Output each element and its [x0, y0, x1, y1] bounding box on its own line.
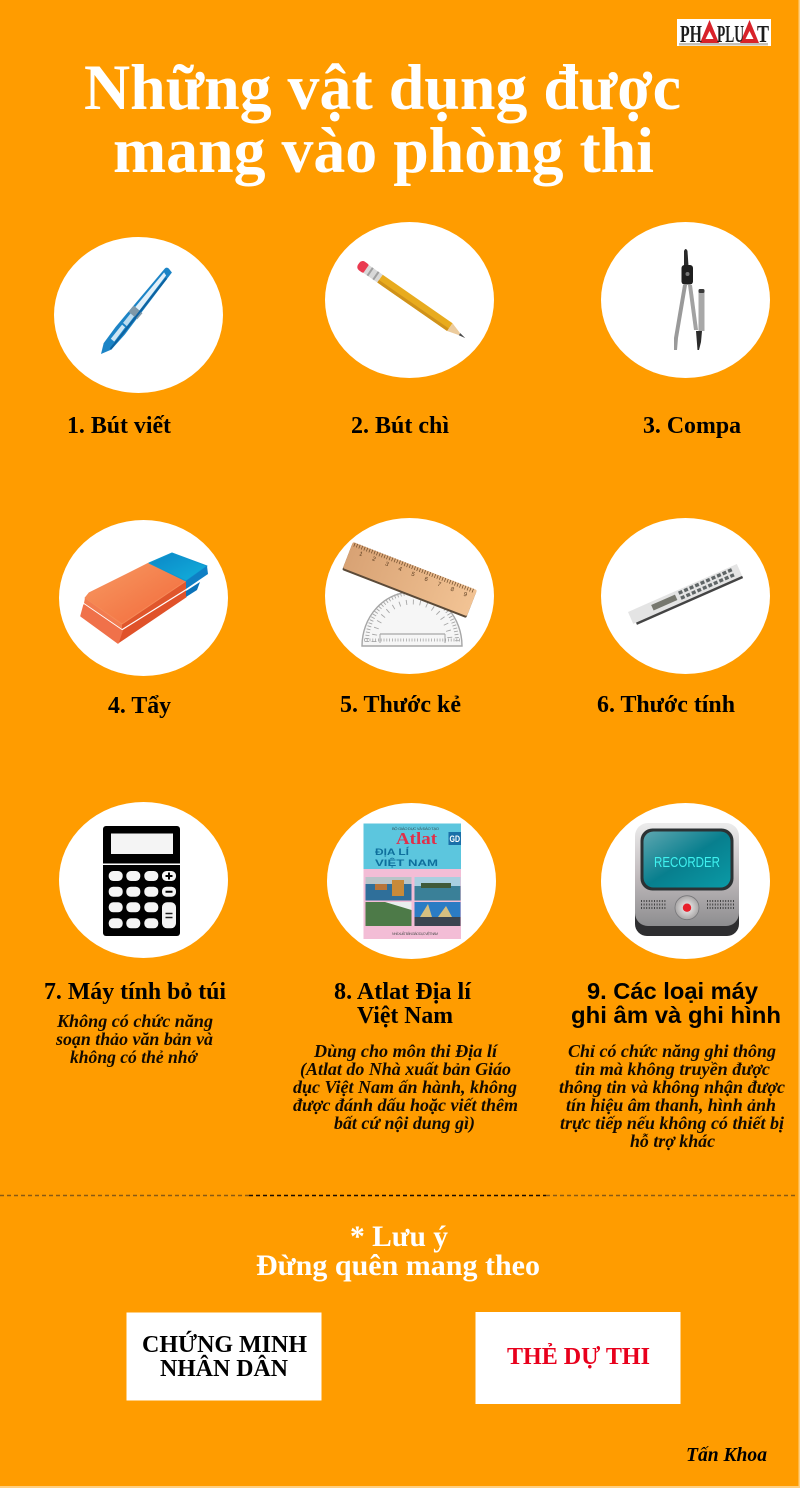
icon: ruler: 2	[371, 556, 377, 563]
description 8: Dùng cho môn thi Địa lí	[313, 1041, 499, 1061]
icon: ruler: 8	[449, 587, 455, 594]
description 8: được đánh dấu hoặc viết thêm	[293, 1095, 518, 1115]
description 7: soạn thảo văn bản và	[55, 1029, 213, 1049]
box: Chứng minh nhân dân: CHỨNG MINH	[142, 1332, 307, 1358]
title	[84, 52, 681, 187]
description 9	[559, 1041, 785, 1151]
description 9: thông tin và không nhận được	[559, 1077, 785, 1097]
description 7: Không có chức năng	[56, 1011, 213, 1031]
icon: ruler: 1	[358, 551, 364, 558]
label 8: 8. Atlat Địa lí	[334, 979, 471, 1005]
icon: atlas book cover: NHÀ XUẤT BẢN GIÁO DỤC VIỆT NAM	[392, 931, 438, 936]
label 7: 7. Máy tính bỏ túi	[44, 979, 226, 1005]
icon: ruler: 3	[384, 561, 390, 568]
note heading	[256, 1220, 540, 1282]
icon: ruler: 7	[436, 582, 442, 589]
icon: ruler: 5	[410, 571, 416, 579]
item 9: recorders	[559, 803, 785, 1151]
label 2: 2. Bút chì	[351, 413, 449, 439]
label 1: 1. Bút viết	[67, 413, 171, 439]
logo: Pháp Luật	[677, 19, 771, 48]
circle 9	[601, 803, 770, 959]
icon: ruler: 6	[423, 577, 429, 584]
item 6: calculator ruler	[597, 518, 770, 718]
icon: compass	[674, 249, 704, 350]
author credit: Tấn Khoa	[686, 1445, 767, 1466]
title: Những vật dụng được	[84, 52, 681, 124]
icon: atlas book cover	[364, 824, 461, 939]
circle 3	[601, 222, 770, 378]
icon: recorder device: RECORDER	[654, 854, 720, 871]
icon: ruler: 9	[462, 592, 468, 599]
note heading: * Lưu ý	[350, 1220, 448, 1253]
icon: calculator ruler	[628, 564, 743, 626]
description 7	[55, 1011, 213, 1067]
icon: atlas book cover: GD	[450, 834, 460, 844]
circle 2	[325, 222, 494, 378]
icon: atlas book cover: ĐỊA LÍ	[375, 847, 410, 857]
box: Thẻ dự thi: THẺ DỰ THI	[507, 1344, 650, 1370]
item 1: pen	[54, 237, 223, 439]
description 9: trực tiếp nếu không có thiết bị	[560, 1113, 784, 1133]
icon: eraser	[81, 553, 208, 643]
description 9: Chỉ có chức năng ghi thông	[568, 1041, 776, 1061]
icon: pen	[96, 267, 176, 358]
logo: Pháp Luật: PLU	[717, 22, 744, 48]
box: Thẻ dự thi	[476, 1312, 680, 1404]
item 5: ruler and protractor	[325, 518, 494, 718]
circle 7	[59, 802, 228, 958]
label 4: 4. Tẩy	[108, 693, 171, 719]
label 8	[334, 979, 471, 1029]
title: mang vào phòng thi	[113, 115, 654, 187]
box: Chứng minh nhân dân: NHÂN DÂN	[160, 1355, 289, 1382]
icon: atlas book cover: VIỆT NAM	[375, 857, 438, 868]
icon: ruler: 4	[397, 566, 403, 573]
logo: Pháp Luật: T	[757, 22, 769, 48]
item 2: pencil	[325, 222, 494, 439]
icon: atlas book cover: Atlat	[396, 829, 437, 848]
description 7: không có thẻ nhớ	[70, 1047, 198, 1067]
item 3: compass	[601, 222, 770, 439]
description 9: tín hiệu âm thanh, hình ảnh	[566, 1095, 776, 1115]
circle 8	[327, 803, 496, 959]
icon: atlas book cover: BỘ GIÁO DỤC VÀ ĐÀO TẠO	[392, 826, 439, 831]
description 8: bất cứ nội dung gì)	[334, 1113, 475, 1134]
item 8: atlas	[293, 803, 518, 1134]
icon: ruler	[342, 542, 477, 618]
item 7: pocket calculator	[44, 802, 228, 1067]
description 8: (Atlat do Nhà xuất bản Giáo	[300, 1059, 511, 1080]
icon: recorder device	[635, 823, 739, 936]
box: Chứng minh nhân dân	[126, 1312, 322, 1400]
icon: calculator	[103, 826, 180, 936]
description 9: hỗ trợ khác	[630, 1131, 715, 1151]
description 8: dục Việt Nam ấn hành, không	[293, 1077, 517, 1097]
logo: Pháp Luật: PH	[680, 22, 702, 48]
description 9: tin mà không truyền được	[575, 1059, 770, 1079]
label 8: Việt Nam	[357, 1003, 453, 1029]
label 5: 5. Thước kẻ	[340, 692, 461, 718]
label 6: 6. Thước tính	[597, 692, 735, 718]
icon: protractor	[362, 592, 462, 646]
circle 6	[601, 518, 770, 674]
icon: pencil	[356, 259, 468, 342]
circle 4	[59, 520, 228, 676]
note heading: Đừng quên mang theo	[256, 1249, 540, 1282]
circle 5	[325, 518, 494, 674]
label 9: 9. Các loại máy	[587, 978, 758, 1004]
description 8	[293, 1041, 518, 1134]
item 4: eraser	[59, 520, 228, 719]
circle 1	[54, 237, 223, 393]
label 3: 3. Compa	[643, 413, 741, 439]
label 9: ghi âm và ghi hình	[571, 1002, 781, 1028]
label 9	[571, 978, 781, 1028]
